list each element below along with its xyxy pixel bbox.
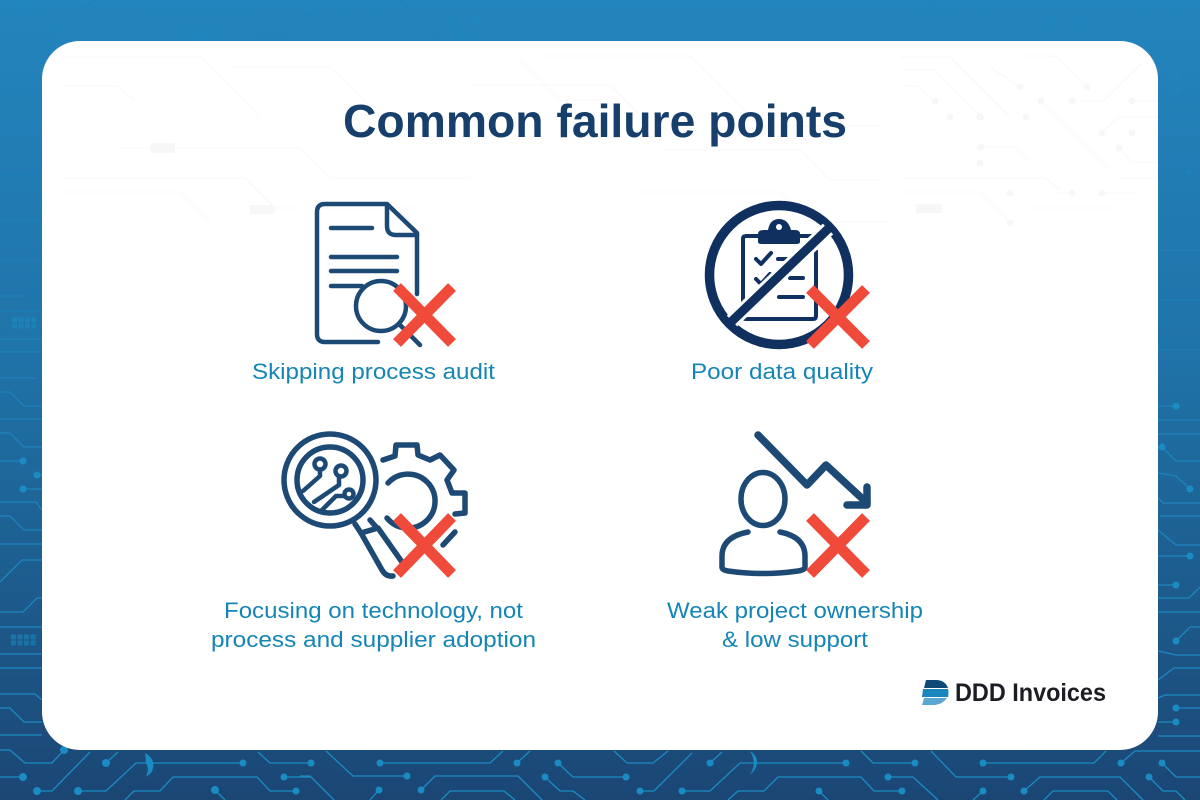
logo: DDD Invoices: DDD Invoices — [955, 679, 1106, 707]
card: faint circuit pattern — [60, 56, 1158, 226]
label: weak project ownership: Weak project ownership — [667, 598, 923, 623]
icon: document with magnifier and red cross — [317, 204, 452, 345]
icon: magnifier over circuit and gear with red cross — [284, 434, 465, 576]
label: weak project ownership: & low support — [722, 627, 868, 652]
label: focusing on technology: process and supplier adoption — [211, 627, 536, 652]
icon: person with falling arrow and red cross — [722, 435, 867, 574]
icon: crossed-out clipboard with red cross — [710, 206, 866, 345]
title: Common failure points — [343, 95, 847, 147]
label: focusing on technology: Focusing on technology, not — [224, 598, 523, 623]
label: poor data quality: Poor data quality — [691, 359, 873, 384]
label: skipping process audit: Skipping process audit — [252, 359, 495, 384]
label: focusing on technology — [211, 598, 536, 652]
label: weak project ownership — [667, 598, 923, 652]
